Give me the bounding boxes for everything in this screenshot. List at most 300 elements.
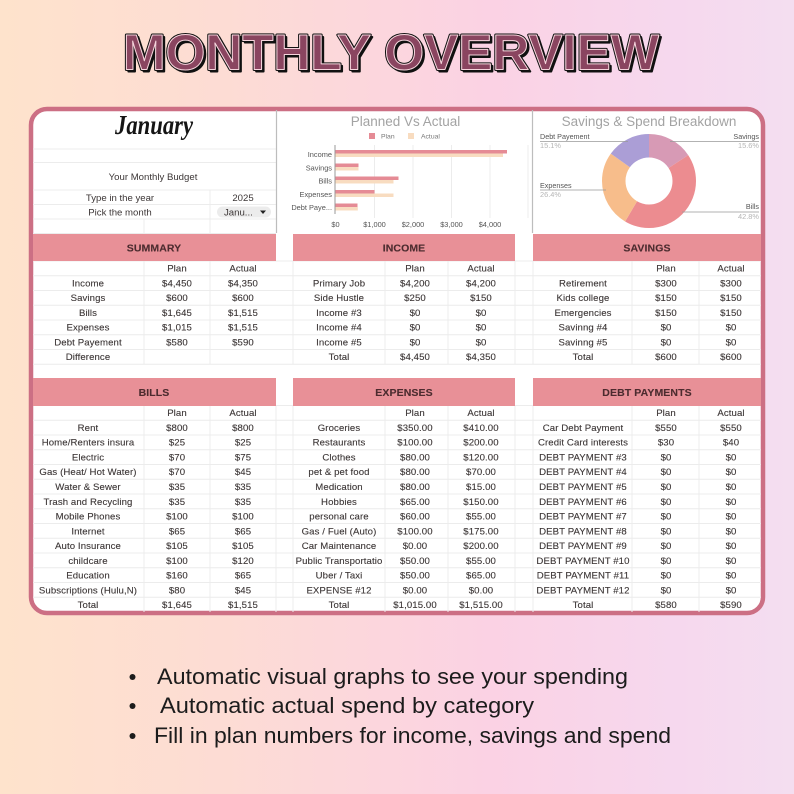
row: credit card: $30 xyxy=(658,438,674,448)
row: insurance xyxy=(42,438,251,448)
row: debt payment xyxy=(54,338,254,348)
row: side hustle xyxy=(314,293,492,304)
row: bills: $1,515 xyxy=(228,308,258,319)
row: debt 4: $0 xyxy=(661,467,671,478)
row: debt 8 xyxy=(539,526,736,538)
row: mobile: $100 xyxy=(166,512,188,522)
chart: planned vs actual bar chart xyxy=(291,114,528,229)
column headers: Plan xyxy=(167,408,187,419)
row: debt 6: $0 xyxy=(726,497,736,508)
row: income 4: $0 xyxy=(476,322,486,334)
row: mobile: $100 xyxy=(232,512,254,522)
heading: savings: SAVINGS xyxy=(623,242,671,254)
value axis labels: $1,000 xyxy=(363,220,386,229)
row: income: $4,350 xyxy=(228,278,258,290)
row: car maintenance: Car Maintenance xyxy=(302,541,376,552)
panel: expenses xyxy=(293,378,515,611)
heading: debt payments xyxy=(533,378,761,406)
row: debt 3: $0 xyxy=(726,452,736,464)
bullet: visual graphs: Automatic visual graphs to see your spending xyxy=(157,664,628,689)
row: bills: Bills xyxy=(79,308,97,319)
row: public transportation: Public Transportatio xyxy=(296,556,382,567)
heading: summary xyxy=(33,234,276,261)
row: hobbies: $150.00 xyxy=(463,497,499,508)
row: retirement: $300 xyxy=(655,278,677,290)
heading: expenses: EXPENSES xyxy=(375,387,433,399)
row: primary job: $4,200 xyxy=(400,278,430,290)
label: savings xyxy=(733,132,759,150)
panel: income xyxy=(293,234,515,363)
title: MONTHLY OVERVIEW xyxy=(125,26,662,82)
bars: bills xyxy=(335,176,398,184)
row: total: $1,515 xyxy=(228,600,258,611)
category axis labels: Expenses xyxy=(300,190,332,199)
row: auto insurance xyxy=(55,541,254,552)
column headers: Actual xyxy=(467,408,495,419)
row: mobile: Mobile Phones xyxy=(56,512,120,522)
row: expense 12: $0.00 xyxy=(403,586,427,596)
heading: income: INCOME xyxy=(383,242,425,254)
row: auto insurance: $105 xyxy=(232,541,254,552)
column headers xyxy=(405,408,495,419)
row: debt 3 xyxy=(539,452,736,464)
label: bills: 42.8% xyxy=(738,212,759,221)
row: electric: $70 xyxy=(169,452,185,464)
row: debt 12: $0 xyxy=(661,586,671,596)
row: uber taxi: $50.00 xyxy=(400,570,430,582)
row: income 5: $0 xyxy=(476,338,486,348)
row: auto insurance: $105 xyxy=(166,541,188,552)
row: income: Income xyxy=(72,278,104,290)
label: bills: Bills xyxy=(746,202,759,211)
row: income 3: $0 xyxy=(476,308,486,319)
row: debt 7 xyxy=(539,512,736,522)
row: debt 5: $0 xyxy=(661,482,671,493)
bars: expenses xyxy=(335,190,394,197)
row: kids college: $150 xyxy=(720,293,742,304)
panel: budget spreadsheet frame xyxy=(31,109,763,613)
chart legend xyxy=(369,133,440,140)
row: debt payment: $590 xyxy=(232,338,254,348)
label: debt payment xyxy=(540,132,590,150)
row: savings: $600 xyxy=(166,293,188,304)
column headers: Plan xyxy=(167,264,187,274)
row: total: Total xyxy=(573,352,593,363)
row: primary job: $4,200 xyxy=(466,278,496,290)
row: side hustle: Side Hustle xyxy=(314,293,364,304)
row: medication: $80.00 xyxy=(400,482,430,493)
heading: income xyxy=(293,234,515,261)
bars: savings xyxy=(335,164,358,170)
row: rent: Rent xyxy=(78,423,99,434)
row: water: $35 xyxy=(235,482,251,493)
row: gas xyxy=(39,467,251,478)
row: total: $1,015.00 xyxy=(393,600,437,611)
row: total: $600 xyxy=(655,352,677,363)
row: debt 9: $0 xyxy=(661,541,671,552)
heading: summary: SUMMARY xyxy=(127,242,181,254)
row: income 5: Income #5 xyxy=(316,338,362,348)
row: savings 5: $0 xyxy=(726,338,736,348)
heading: savings xyxy=(533,234,761,261)
row: subscriptions: Subscriptions (Hulu,N) xyxy=(39,586,137,596)
row: debt 11: $0 xyxy=(726,570,736,582)
row: savings xyxy=(71,293,254,304)
row: income 4: $0 xyxy=(410,322,420,334)
row: groceries xyxy=(318,423,499,434)
row: debt 7: $0 xyxy=(661,512,671,522)
heading: debt payments: DEBT PAYMENTS xyxy=(602,387,692,399)
row: trash xyxy=(44,497,251,508)
row: kids college: Kids college xyxy=(557,293,609,304)
row: expenses: Expenses xyxy=(67,322,110,334)
row: personal care: $55.00 xyxy=(466,512,496,522)
row: car debt: Car Debt Payment xyxy=(543,423,623,434)
heading: bills: BILLS xyxy=(139,387,169,399)
value axis labels xyxy=(331,220,501,229)
label: expenses: 26.4% xyxy=(540,190,561,199)
bars: income xyxy=(335,150,507,157)
row: retirement: Retirement xyxy=(559,278,607,290)
label: bills xyxy=(738,202,759,221)
row: total: $1,515.00 xyxy=(459,600,503,611)
row: gas fuel xyxy=(302,526,499,538)
row: expenses: $1,515 xyxy=(228,322,258,334)
row: hobbies: $65.00 xyxy=(400,497,430,508)
value axis labels: $2,000 xyxy=(402,220,424,229)
row: clothes xyxy=(322,452,499,464)
value axis labels: $4,000 xyxy=(479,220,501,229)
row: debt 10: DEBT PAYMENT #10 xyxy=(536,556,630,567)
row: water: Water & Sewer xyxy=(55,482,121,493)
heading: bills xyxy=(33,378,276,406)
row: debt 7: $0 xyxy=(726,512,736,522)
category axis labels: Debt Paye... xyxy=(291,203,332,212)
row: restaurants xyxy=(313,438,499,448)
column headers: Plan xyxy=(405,264,425,274)
row: bills xyxy=(79,308,258,319)
row: auto insurance: Auto Insurance xyxy=(55,541,121,552)
chart title: Savings & Spend Breakdown xyxy=(562,114,736,129)
row: car maintenance: $200.00 xyxy=(463,541,499,552)
row: savings: Savings xyxy=(71,293,106,304)
row: personal care: personal care xyxy=(309,512,369,522)
row: internet: Internet xyxy=(71,526,105,538)
row: emergencies xyxy=(554,308,742,319)
row: debt 8: $0 xyxy=(726,526,736,538)
row: expenses: $1,015 xyxy=(162,322,192,334)
column headers: Plan xyxy=(656,264,676,274)
row: income 3: Income #3 xyxy=(316,308,362,319)
row: debt 4 xyxy=(539,467,736,478)
row: savings 4: $0 xyxy=(726,322,736,334)
row: pet xyxy=(308,467,496,478)
row: total xyxy=(573,600,742,611)
row: insurance: $25 xyxy=(169,438,185,448)
row: uber taxi xyxy=(316,570,496,582)
row: debt 5 xyxy=(539,482,736,493)
category axis labels xyxy=(291,150,332,212)
row: subscriptions xyxy=(39,586,251,596)
row: groceries: $350.00 xyxy=(397,423,433,434)
row: gas fuel: Gas / Fuel (Auto) xyxy=(302,526,376,538)
row: internet: $65 xyxy=(169,526,185,538)
row: income 5 xyxy=(316,338,486,348)
row: restaurants: $100.00 xyxy=(397,438,433,448)
label: debt payment: Debt Payement xyxy=(540,132,590,141)
column headers xyxy=(656,264,745,274)
row: debt payment: $580 xyxy=(166,338,188,348)
row: rent: $800 xyxy=(166,423,188,434)
row: insurance: $25 xyxy=(235,438,251,448)
row: expense 12 xyxy=(306,586,493,596)
row: debt 8: DEBT PAYMENT #8 xyxy=(539,526,627,538)
row: rent xyxy=(78,423,254,434)
row: education xyxy=(66,570,251,582)
row: gas fuel: $175.00 xyxy=(463,526,499,538)
title: MONTHLY OVERVIEW xyxy=(123,24,660,80)
row: savings 4: Savinng #4 xyxy=(558,322,608,334)
row: credit card: $40 xyxy=(723,438,739,448)
column headers: Plan xyxy=(405,408,425,419)
row: uber taxi: Uber / Taxi xyxy=(316,570,362,582)
row: clothes: $120.00 xyxy=(463,452,499,464)
bars: debt payment xyxy=(335,204,358,210)
category axis labels: Income xyxy=(308,150,332,159)
row: medication xyxy=(315,482,496,493)
row: car maintenance xyxy=(302,541,499,552)
row: gas: Gas (Heat/ Hot Water) xyxy=(39,467,137,478)
row: debt payment: Debt Payement xyxy=(54,338,122,348)
row: clothes: $80.00 xyxy=(400,452,430,464)
column headers: Actual xyxy=(229,264,257,274)
row: total: $580 xyxy=(655,600,677,611)
column headers xyxy=(656,408,745,419)
row: trash: $35 xyxy=(235,497,251,508)
chart: savings and spend donut xyxy=(540,114,759,221)
row: education: Education xyxy=(66,570,110,582)
row: kids college: $150 xyxy=(655,293,677,304)
row: debt 12 xyxy=(536,586,736,596)
row: rent: $800 xyxy=(232,423,254,434)
category axis labels: Bills xyxy=(318,176,332,186)
row: total: $4,350 xyxy=(466,352,496,363)
row: savings 5 xyxy=(558,338,736,348)
row: uber taxi: $65.00 xyxy=(466,570,496,582)
row: childcare: $100 xyxy=(166,556,188,567)
row: debt 9: $0 xyxy=(726,541,736,552)
chart title: Planned Vs Actual xyxy=(351,114,460,129)
row: total xyxy=(78,600,258,611)
row: savings 5: Savinng #5 xyxy=(558,338,608,348)
title: MONTHLY OVERVIEW xyxy=(123,24,660,80)
row: savings 4 xyxy=(558,322,736,334)
row: total xyxy=(573,352,742,363)
row: debt 5: DEBT PAYMENT #5 xyxy=(539,482,627,493)
label: savings: 15.6% xyxy=(738,141,759,150)
row: expenses xyxy=(67,322,258,334)
bullet: plan numbers: Fill in plan numbers for income, savings and spend xyxy=(154,723,671,748)
row: kids college xyxy=(557,293,742,304)
row: total: Total xyxy=(78,600,98,611)
row: education: $65 xyxy=(235,570,251,582)
bullet list: features xyxy=(130,664,671,748)
row: debt 4: DEBT PAYMENT #4 xyxy=(539,467,627,478)
value axis labels: $0 xyxy=(331,220,340,229)
column headers: Actual xyxy=(717,408,745,419)
row: trash: Trash and Recycling xyxy=(44,497,132,508)
row: childcare: childcare xyxy=(68,556,108,567)
panel: summary xyxy=(33,234,276,363)
row: subscriptions: $45 xyxy=(235,586,251,596)
text: year value: 2025 xyxy=(232,193,254,204)
row: hobbies xyxy=(321,497,499,508)
row: primary job xyxy=(313,278,496,290)
row: restaurants: Restaurants xyxy=(313,438,366,448)
row: savings 4: $0 xyxy=(661,322,671,334)
row: car debt xyxy=(543,423,742,434)
row: income 4 xyxy=(316,322,486,334)
row: water: $35 xyxy=(169,482,185,493)
row: internet xyxy=(71,526,251,538)
column headers xyxy=(405,264,495,274)
row: debt 6 xyxy=(539,497,736,508)
row: debt 12: DEBT PAYMENT #12 xyxy=(536,586,630,596)
row: medication: $15.00 xyxy=(466,482,496,493)
donut slices xyxy=(614,146,684,216)
row: internet: $65 xyxy=(235,526,251,538)
row: personal care xyxy=(309,512,496,522)
row: groceries: $410.00 xyxy=(463,423,499,434)
row: total: Total xyxy=(573,600,593,611)
category axis labels: Savings xyxy=(306,164,332,172)
row: total: $590 xyxy=(720,600,742,611)
chart legend: Actual xyxy=(421,134,440,140)
chart legend: Plan xyxy=(381,134,395,140)
row: debt 6: DEBT PAYMENT #6 xyxy=(539,497,627,508)
row: trash: $35 xyxy=(169,497,185,508)
row: emergencies: $150 xyxy=(655,308,677,319)
row: water xyxy=(55,482,251,493)
text: your monthly budget: Your Monthly Budget xyxy=(109,172,198,183)
label: expenses xyxy=(540,181,572,199)
row: medication: Medication xyxy=(315,482,363,493)
column headers: Plan xyxy=(656,408,676,419)
row: expense 12: $0.00 xyxy=(469,586,493,596)
row: debt 11: DEBT PAYMENT #11 xyxy=(537,570,629,582)
row: clothes: Clothes xyxy=(322,452,356,464)
row: bills: $1,645 xyxy=(162,308,192,319)
row: debt 11 xyxy=(537,570,736,582)
row: debt 4: $0 xyxy=(726,467,736,478)
row: debt 12: $0 xyxy=(726,586,736,596)
row: car maintenance: $0.00 xyxy=(403,541,427,552)
row: primary job: Primary Job xyxy=(313,278,365,290)
row: debt 3: DEBT PAYMENT #3 xyxy=(539,452,627,464)
bullet: actual spend: Automatic actual spend by category xyxy=(160,693,534,718)
row: car debt: $550 xyxy=(720,423,742,434)
row: savings 5: $0 xyxy=(661,338,671,348)
row: electric: $75 xyxy=(235,452,251,464)
row: income: $4,450 xyxy=(162,278,192,290)
row: income xyxy=(72,278,258,290)
row: groceries: Groceries xyxy=(318,423,360,434)
row: pet: pet & pet food xyxy=(308,467,370,478)
row: car debt: $550 xyxy=(655,423,677,434)
row: total: $4,450 xyxy=(400,352,430,363)
row: childcare xyxy=(68,556,254,567)
row: personal care: $60.00 xyxy=(400,512,430,522)
row: pet: $70.00 xyxy=(466,467,496,478)
column headers: Actual xyxy=(467,264,495,274)
row: total xyxy=(329,352,496,363)
dropdown: month: Janu... xyxy=(224,208,253,218)
label: savings: Savings xyxy=(733,132,759,141)
row: debt 10: $0 xyxy=(661,556,671,567)
row: debt 5: $0 xyxy=(726,482,736,493)
row: credit card xyxy=(538,438,739,448)
heading: expenses xyxy=(293,378,515,406)
row: public transportation: $55.00 xyxy=(466,556,496,567)
row: difference: Difference xyxy=(66,352,110,363)
row: credit card: Credit Card interests xyxy=(538,438,628,448)
label: expenses: Expenses xyxy=(540,181,572,190)
column headers: Actual xyxy=(229,408,257,419)
text: pick the month: Pick the month xyxy=(88,208,152,218)
row: side hustle: $150 xyxy=(470,293,492,304)
text: type in the year: Type in the year xyxy=(86,193,155,204)
row: total: $1,645 xyxy=(162,600,192,611)
row: retirement: $300 xyxy=(720,278,742,290)
row: childcare: $120 xyxy=(232,556,254,567)
row: emergencies: $150 xyxy=(720,308,742,319)
row: gas: $45 xyxy=(235,467,251,478)
row: income 3 xyxy=(316,308,486,319)
row: insurance: Home/Renters insura xyxy=(42,438,135,448)
row: expense 12: EXPENSE #12 xyxy=(306,586,372,596)
row: debt 10: $0 xyxy=(726,556,736,567)
row: debt 7: DEBT PAYMENT #7 xyxy=(539,512,627,522)
column headers xyxy=(167,408,257,419)
heading: January: January xyxy=(114,110,194,140)
row: debt 6: $0 xyxy=(661,497,671,508)
row: total: $600 xyxy=(720,352,742,363)
row: retirement xyxy=(559,278,742,290)
row: income 5: $0 xyxy=(410,338,420,348)
row: debt 8: $0 xyxy=(661,526,671,538)
row: income 3: $0 xyxy=(410,308,420,319)
column headers xyxy=(167,264,257,274)
row: debt 9 xyxy=(539,541,736,552)
row: emergencies: Emergencies xyxy=(554,308,612,319)
row: side hustle: $250 xyxy=(404,293,426,304)
dropdown: month xyxy=(217,206,271,218)
row: debt 11: $0 xyxy=(661,570,671,582)
label: debt payment: 15.1% xyxy=(540,141,561,150)
row: savings: $600 xyxy=(232,293,254,304)
row: hobbies: Hobbies xyxy=(321,497,357,508)
row: mobile xyxy=(56,512,254,522)
row: gas fuel: $100.00 xyxy=(397,526,433,538)
value axis labels: $3,000 xyxy=(440,220,463,229)
row: public transportation xyxy=(296,556,496,567)
row: subscriptions: $80 xyxy=(169,586,185,596)
row: restaurants: $200.00 xyxy=(463,438,499,448)
column headers: Actual xyxy=(717,264,745,274)
panel: month selector xyxy=(86,110,271,218)
row: electric: Electric xyxy=(72,452,104,464)
row: debt 3: $0 xyxy=(661,452,671,464)
